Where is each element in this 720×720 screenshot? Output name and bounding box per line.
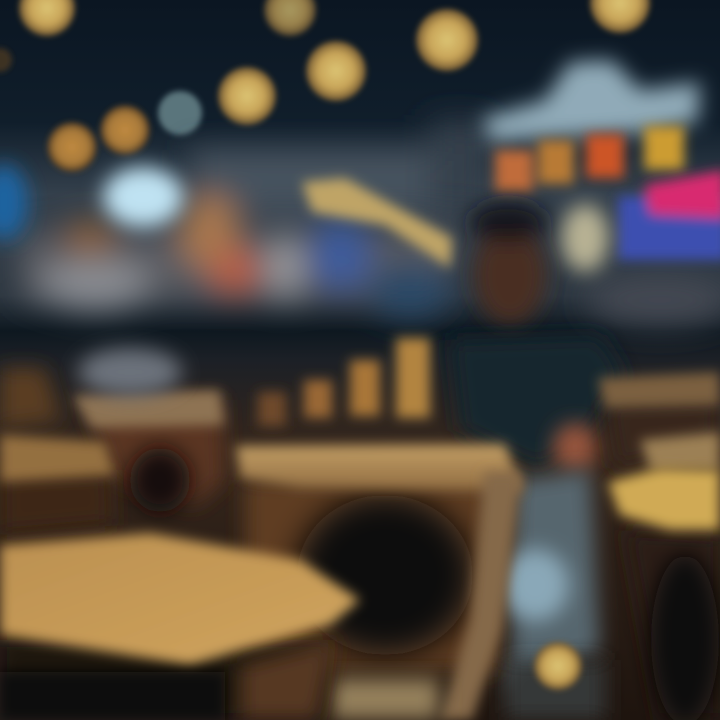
- person: [450, 202, 625, 720]
- pendant lights: [0, 0, 650, 172]
- sign board top: [482, 60, 700, 142]
- background left table: [72, 348, 225, 512]
- face and hair: [470, 202, 546, 325]
- right tables: [598, 372, 720, 720]
- lower leg: [505, 660, 605, 720]
- gold banner: [302, 178, 452, 268]
- centre table: [236, 444, 524, 720]
- jeans: [510, 470, 600, 690]
- hand: [553, 423, 597, 471]
- foreground table: [0, 533, 360, 720]
- bar chart: [258, 338, 430, 426]
- torso: [450, 335, 625, 470]
- coloured chart blocks: [495, 126, 684, 192]
- floor light: [534, 642, 582, 690]
- white screen: [103, 167, 183, 227]
- white sign beside person: [561, 204, 609, 272]
- middle shop band: [20, 120, 720, 326]
- pink and blue sign: [618, 170, 720, 260]
- far left tables: [0, 368, 115, 535]
- blue glow sign: [0, 164, 28, 240]
